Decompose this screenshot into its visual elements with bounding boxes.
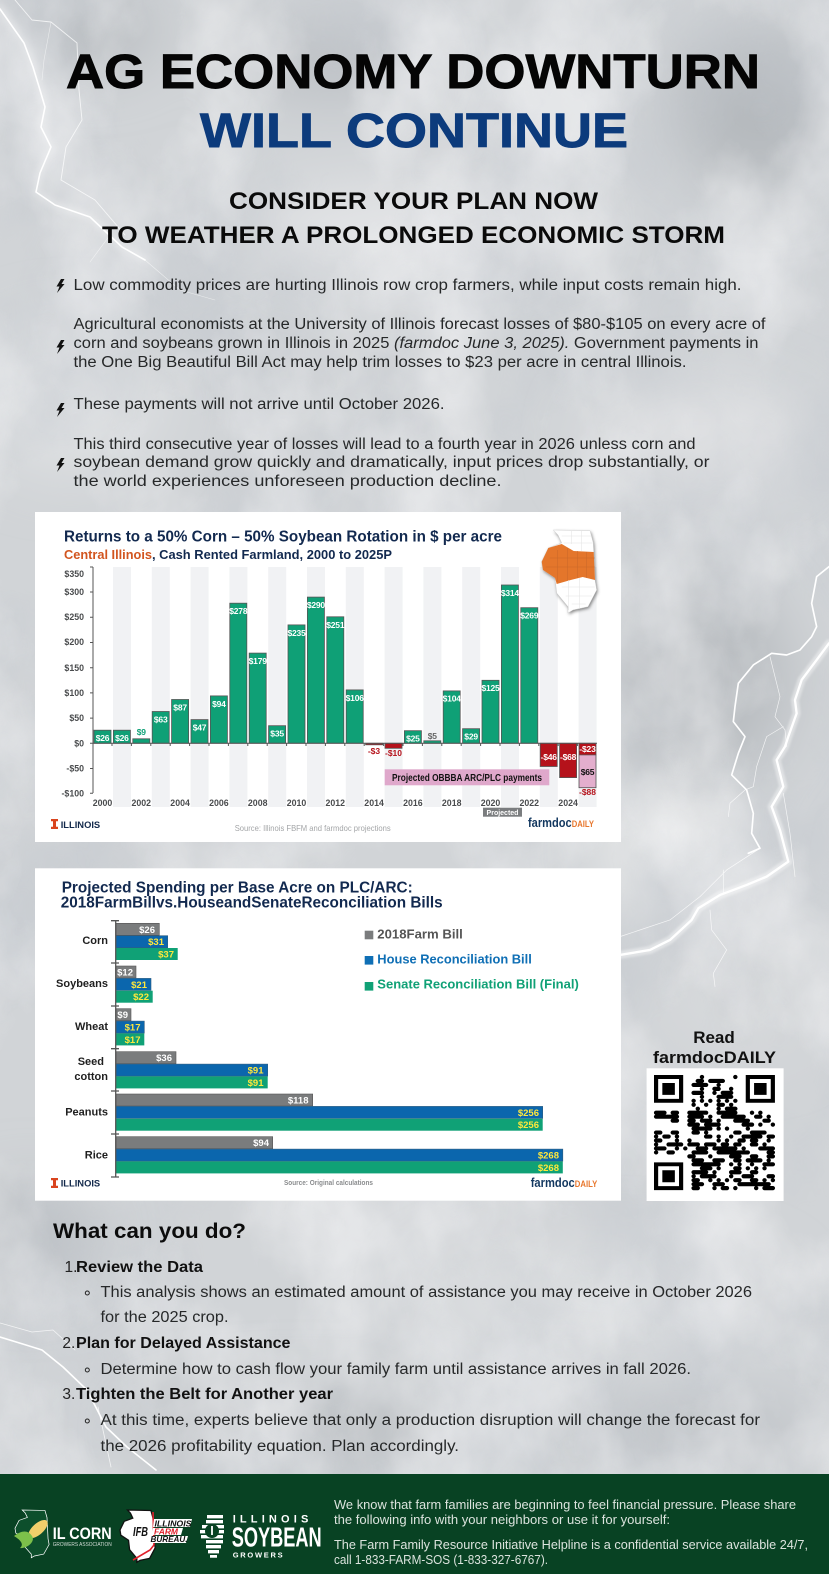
- green bars: [94, 585, 538, 743]
- value labels: $268: [538, 1151, 559, 1162]
- crop labels: Soybeans: [56, 978, 108, 990]
- value labels: $118: [288, 1096, 308, 1106]
- x axis years: 2000: [93, 798, 112, 808]
- bar value labels: $106: [346, 693, 364, 703]
- qr code: [647, 1068, 784, 1201]
- gray bars: 2018 farm bill: [116, 923, 313, 1149]
- logo: illinois farm bureau: BUREAU.: [150, 1535, 188, 1544]
- chart title: Projected Spending per Base Acre on PLC/ARC:: [62, 879, 413, 896]
- chart subtitle: Central Illinois: [64, 548, 152, 562]
- logo: illinois soybean growers: GROWERS: [233, 1551, 283, 1560]
- icon: lightning bullet 4: [56, 458, 64, 472]
- logo: illinois: ILLINOIS: [61, 820, 100, 831]
- step 1: This analysis shows an estimated amount of assistance you may receive in October 2026: [100, 1284, 752, 1301]
- logo: illinois farm bureau: IFB: [133, 1524, 148, 1539]
- source note: Source: Original calculations: [284, 1178, 373, 1187]
- logo: illinois farm bureau: ILLINOIS: [154, 1520, 192, 1528]
- crop labels: Peanuts: [65, 1107, 108, 1119]
- bar value labels: [96, 588, 596, 797]
- tag: projected: [483, 808, 522, 817]
- bar value labels: $278: [229, 606, 248, 616]
- x axis years: 2008: [248, 798, 268, 808]
- value labels: $37: [158, 950, 174, 960]
- chart title: [61, 879, 443, 911]
- value labels: $36: [156, 1053, 172, 1064]
- value labels: $91: [248, 1078, 264, 1089]
- panel: spending chart: [35, 868, 621, 1201]
- footer text: the following info with your neighbors or use it for yourself:: [334, 1513, 670, 1527]
- y axis: $50: [69, 713, 84, 723]
- y axis: $0: [74, 738, 84, 748]
- x axis years: 2014: [364, 798, 384, 808]
- bar value labels: $94: [212, 699, 226, 709]
- bar value labels: $26: [96, 733, 110, 743]
- logo: illinois soybean growers: [200, 1513, 322, 1560]
- bar value labels: $29: [464, 732, 478, 742]
- heading: read farmdocDAILY: [653, 1028, 777, 1067]
- text: third consecutive year: This third consecutive year of losses will lead to a fourth year in 2026 unless corn and: [74, 436, 696, 453]
- step 1: Review the Data: [76, 1259, 203, 1276]
- value labels: $17: [125, 1035, 140, 1046]
- value labels: $256: [518, 1120, 539, 1131]
- bar value labels: $290: [307, 600, 325, 610]
- logo: illinois farm bureau: FARM: [154, 1527, 178, 1536]
- step 2: [62, 1335, 691, 1378]
- step 3: [62, 1386, 760, 1455]
- logo: farmdoc daily: farmdocDAILY: [531, 1175, 597, 1190]
- section: what can you do: [53, 1220, 760, 1455]
- x axis years: 2010: [287, 798, 306, 808]
- text: third consecutive year: the world experiences unforeseen production decline.: [74, 473, 502, 490]
- logo: il corn: [14, 1510, 112, 1558]
- crop labels: Corn: [82, 935, 108, 947]
- value labels: $26: [139, 925, 155, 936]
- source note: Source: Illinois FBFM and farmdoc projections: [235, 823, 391, 833]
- crop labels: cotton: [74, 1071, 108, 1083]
- x axis years: 2002: [132, 798, 151, 808]
- y axis: [62, 567, 93, 798]
- step 3: 3.: [62, 1386, 75, 1403]
- text: economists forecast: the One Big Beautiful Bill Act may help trim losses to $23 per acre in central Illinois.: [74, 354, 687, 371]
- callout: projected payments: [385, 769, 549, 785]
- bar value labels: $104: [443, 694, 461, 704]
- footer text: The Farm Family Resource Initiative Helpline is a confidential service available 24/7,: [334, 1538, 808, 1552]
- bar value labels: $26: [115, 733, 129, 743]
- chart title: 2018FarmBillvs.HouseandSenateReconciliation Bills: [61, 894, 443, 911]
- negative bars: [366, 743, 596, 778]
- logo: illinois farm bureau: [120, 1510, 192, 1562]
- heading: read farmdocDAILY: farmdocDAILY: [653, 1048, 777, 1067]
- x axis years: 2020: [481, 798, 500, 808]
- y axis: $200: [64, 637, 84, 647]
- value labels: $12: [117, 968, 133, 978]
- x axis years: [93, 798, 578, 808]
- x axis years: 2012: [326, 798, 345, 808]
- y axis: -$100: [62, 788, 84, 798]
- legend: [365, 926, 579, 992]
- crop labels: Seed: [78, 1056, 104, 1068]
- value labels: $31: [148, 937, 165, 948]
- bar value labels: -$10: [385, 748, 402, 758]
- text: economists forecast: Agricultural economists at the University of Illinois forecast losses of $80-$105 on every acre of: [74, 316, 766, 333]
- step 1: [64, 1259, 752, 1326]
- bar value labels: $269: [520, 610, 539, 620]
- text: third consecutive year: [74, 436, 710, 490]
- lightning: right side: [620, 567, 829, 987]
- title: WILL CONTINUE: [200, 105, 628, 158]
- step 1: for the 2025 crop.: [100, 1309, 228, 1326]
- text: economists forecast: [74, 316, 766, 371]
- panel: returns chart: [35, 512, 621, 842]
- logo: il corn: GROWERS ASSOCIATION: [53, 1542, 112, 1548]
- bar value labels: $65: [581, 767, 595, 777]
- chart subtitle: , Cash Rented Farmland, 2000 to 2025P: [152, 548, 392, 562]
- x axis years: 2006: [209, 798, 229, 808]
- logo: farmdoc daily: farmdocDAILY: [528, 815, 594, 830]
- step 1: 1.: [64, 1259, 77, 1276]
- y axis: -$50: [66, 764, 84, 774]
- bar value labels: $9: [137, 727, 146, 737]
- value labels: $91: [248, 1066, 264, 1077]
- crop labels: Wheat: [75, 1021, 108, 1033]
- step 2: Determine how to cash flow your family farm until assistance arrives in fall 2026.: [100, 1361, 691, 1378]
- text: payments will not arrive: These payments will not arrive until October 2026.: [74, 396, 444, 413]
- logo: il corn: IL CORN: [53, 1524, 112, 1543]
- value labels: $256: [518, 1108, 539, 1119]
- x axis years: 2004: [170, 798, 190, 808]
- step 2: 2.: [62, 1335, 75, 1352]
- value labels: $268: [538, 1163, 559, 1174]
- x axis years: 2016: [403, 798, 423, 808]
- bar value labels: $251: [326, 620, 345, 630]
- logo: illinois soybean growers: ILLINOIS: [233, 1513, 308, 1525]
- y axis: $150: [64, 663, 84, 673]
- bar value labels: $235: [287, 628, 306, 638]
- tag: projected: Projected: [487, 810, 518, 817]
- footer text: [334, 1498, 808, 1567]
- bar value labels: $35: [270, 728, 284, 738]
- blue bars: house bill: [116, 936, 563, 1161]
- projected payment bar: [579, 755, 596, 788]
- bar value labels: -$3: [368, 746, 380, 756]
- crop labels: Rice: [85, 1149, 108, 1161]
- legend: House Reconciliation Bill: [377, 952, 532, 967]
- icon: lightning bullet 3: [56, 403, 64, 417]
- chart title: Returns to a 50% Corn – 50% Soybean Rotation in $ per acre: [64, 529, 502, 546]
- bar value labels: $125: [481, 683, 500, 693]
- bar value labels: -$23: [579, 744, 596, 754]
- lightning: lower left: [0, 1323, 156, 1470]
- text: economists forecast: corn and soybeans grown in Illinois in 2025 (farmdoc June 3, 2025). Government payments in: [74, 335, 758, 352]
- subtitle: TO WEATHER A PROLONGED ECONOMIC STORM: [102, 222, 725, 249]
- value labels: [117, 925, 559, 1174]
- bar value labels: $63: [154, 714, 168, 724]
- bar value labels: $87: [173, 702, 187, 712]
- heading: What can you do?: [53, 1220, 246, 1243]
- footer text: We know that farm families are beginning to feel financial pressure. Please share: [334, 1498, 796, 1512]
- axis: [111, 921, 119, 1177]
- logo: illinois: ILLINOIS: [61, 1178, 100, 1190]
- value labels: $21: [131, 980, 148, 991]
- y axis: $250: [64, 612, 84, 622]
- y axis: $300: [64, 587, 84, 597]
- logo: illinois soybean growers: SOYBEAN: [232, 1522, 322, 1553]
- icon: lightning bullet 2: [56, 340, 64, 354]
- subtitle: CONSIDER YOUR PLAN NOW: [229, 188, 599, 215]
- text: low commodity prices: Low commodity prices are hurting Illinois row crop farmers, while input costs remain high.: [74, 277, 742, 294]
- callout: projected payments: Projected OBBBA ARC/PLC payments: [392, 773, 542, 784]
- step 3: the 2026 profitability equation. Plan accordingly.: [100, 1438, 459, 1455]
- step 3: At this time, experts believe that only a production disruption will change the forecast for: [100, 1412, 760, 1429]
- title: [66, 46, 760, 158]
- crop labels: [56, 935, 108, 1161]
- y axis: $100: [64, 688, 84, 698]
- footer text: call 1-833-FARM-SOS (1-833-327-6767).: [334, 1553, 548, 1567]
- legend: Senate Reconciliation Bill (Final): [377, 977, 579, 992]
- bar value labels: $5: [428, 731, 437, 741]
- heading: read farmdocDAILY: Read: [693, 1028, 735, 1047]
- value labels: $22: [133, 992, 149, 1003]
- bar value labels: -$68: [560, 752, 577, 762]
- bar value labels: -$46: [541, 752, 557, 762]
- title: AG ECONOMY DOWNTURN: [66, 46, 760, 99]
- x axis years: 2024: [558, 798, 578, 808]
- y axis: $350: [64, 569, 84, 579]
- bar value labels: $314: [501, 588, 519, 598]
- value labels: $17: [125, 1023, 140, 1034]
- footer band: [0, 1474, 829, 1574]
- text: third consecutive year: soybean demand grow quickly and dramatically, input prices drop substantially, or: [74, 454, 710, 471]
- step 2: Plan for Delayed Assistance: [76, 1335, 291, 1352]
- step 3: Tighten the Belt for Another year: [76, 1386, 333, 1403]
- subtitle: [102, 188, 725, 249]
- green bars: senate bill: [116, 948, 563, 1173]
- bar value labels: $25: [406, 734, 420, 744]
- bar value labels: $47: [193, 722, 207, 732]
- legend: 2018Farm Bill: [377, 926, 463, 941]
- bar value labels: -$88: [579, 787, 596, 797]
- icon: lightning bullet 1: [56, 279, 64, 293]
- x axis years: 2018: [442, 798, 462, 808]
- value labels: $94: [253, 1138, 270, 1149]
- value labels: $9: [117, 1010, 128, 1021]
- x axis years: 2022: [520, 798, 539, 808]
- bar value labels: $179: [249, 656, 267, 666]
- lightning: upper left: [0, 0, 215, 300]
- illinois map: [542, 530, 598, 614]
